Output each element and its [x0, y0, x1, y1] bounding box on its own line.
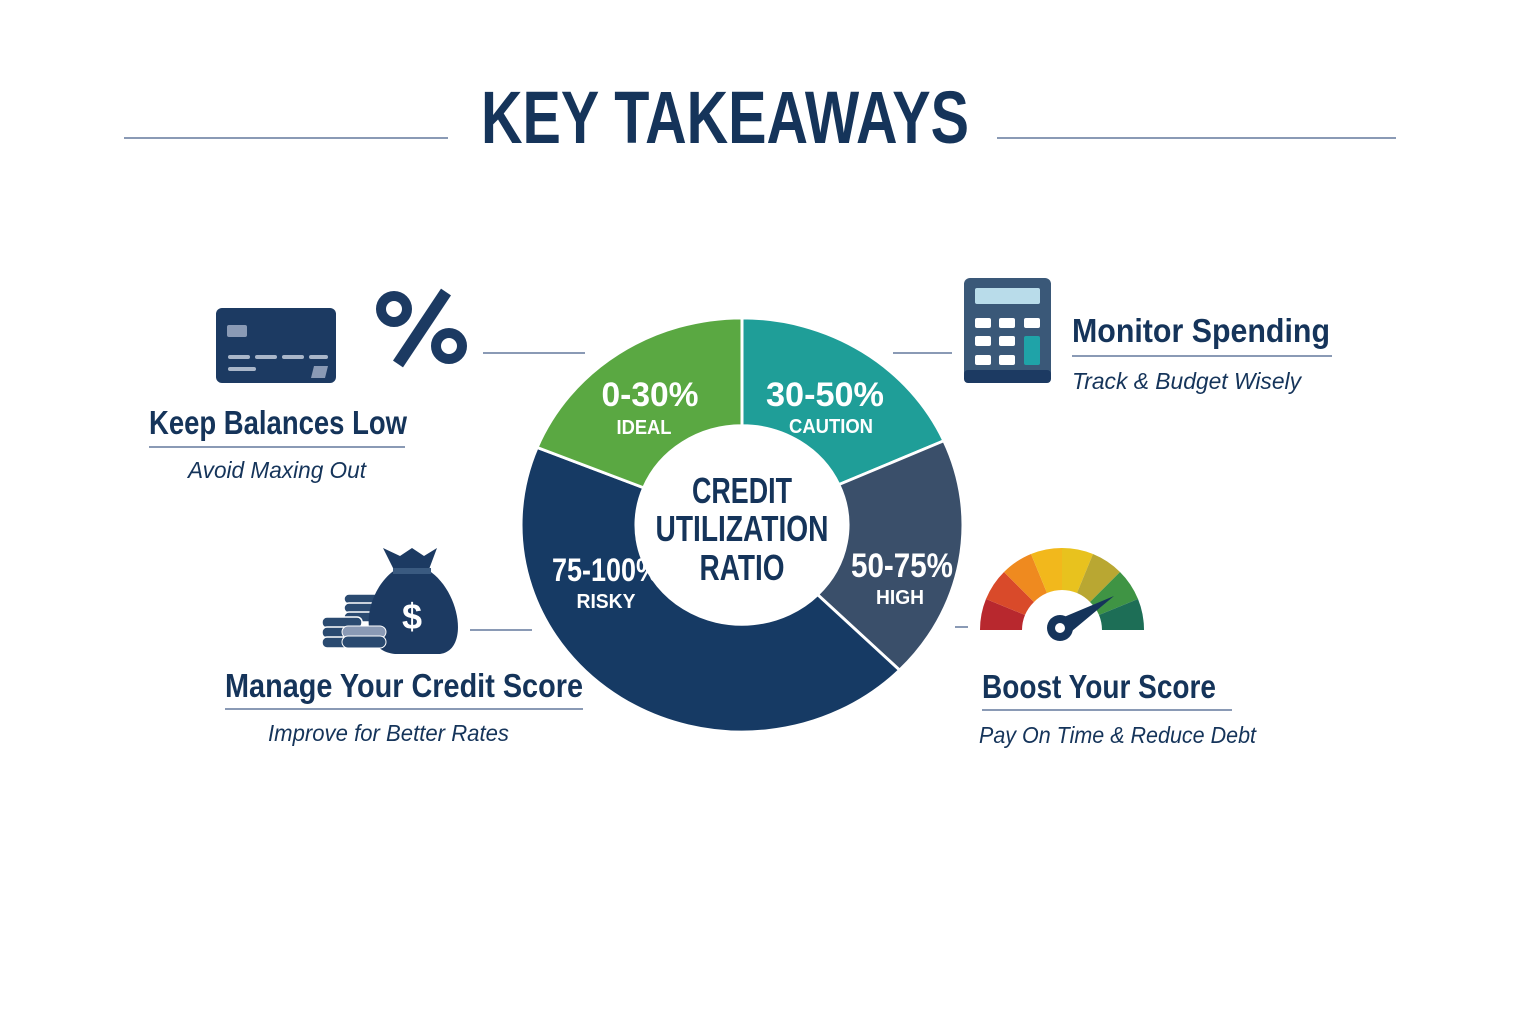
Keep Balances Low [149, 404, 407, 483]
icon: calculator [964, 278, 1051, 383]
Manage Your Credit Score: Manage Your Credit Score [225, 667, 583, 704]
donut labels: 0-30% [602, 376, 698, 414]
donut labels: IDEAL [616, 417, 672, 439]
icon: percent [381, 292, 462, 364]
center label: RATIO [700, 547, 784, 588]
icon: credit card [216, 308, 336, 383]
donut labels: HIGH [876, 587, 924, 609]
donut chart [521, 318, 963, 732]
Boost Your Score: Boost Your Score [982, 668, 1216, 705]
Boost Your Score: Pay On Time & Reduce Debt [979, 722, 1258, 748]
center label: CREDIT [692, 470, 792, 511]
donut labels [552, 376, 953, 613]
donut labels: 75-100% [552, 552, 660, 588]
center label [656, 470, 828, 588]
Monitor Spending: Monitor Spending [1072, 312, 1330, 349]
Monitor Spending: Track & Budget Wisely [1072, 368, 1302, 394]
donut labels: RISKY [576, 591, 636, 613]
Manage Your Credit Score: Improve for Better Rates [268, 720, 509, 746]
Monitor Spending [1072, 312, 1332, 394]
donut labels: CAUTION [789, 416, 873, 438]
icon: gauge [980, 548, 1144, 641]
center label: UTILIZATION [656, 508, 828, 549]
donut labels: 30-50% [766, 376, 884, 414]
icon: money bag: $ [402, 596, 422, 637]
icon: money bag [322, 548, 458, 654]
Boost Your Score [979, 668, 1258, 748]
Keep Balances Low: Avoid Maxing Out [186, 457, 368, 483]
title: KEY TAKEAWAYS [481, 76, 969, 159]
connectors [470, 353, 968, 630]
Keep Balances Low: Keep Balances Low [149, 404, 407, 441]
Manage Your Credit Score [225, 667, 583, 746]
donut labels: 50-75% [851, 547, 953, 585]
